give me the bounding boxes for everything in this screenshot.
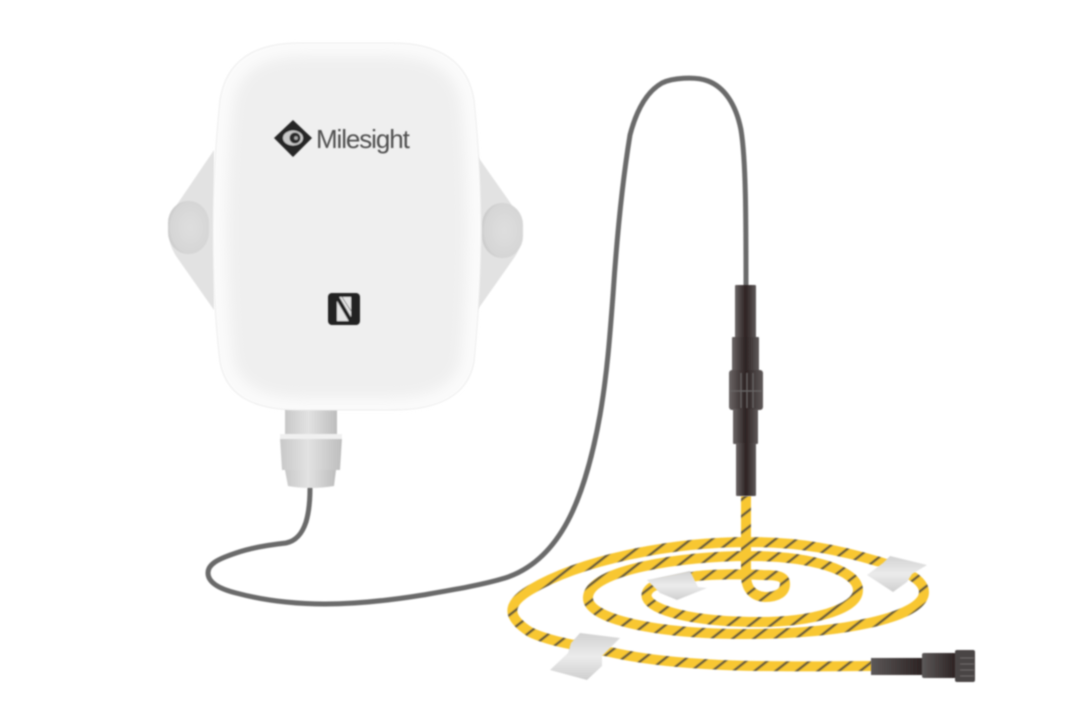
mounting ears bbox=[168, 150, 523, 312]
brand name: Milesight bbox=[316, 124, 411, 154]
rope end connector bbox=[871, 650, 975, 682]
logo mark bbox=[274, 120, 312, 157]
inline cable connector bbox=[729, 285, 763, 496]
gray sensor cable bbox=[208, 78, 746, 604]
device body bbox=[213, 43, 481, 410]
clip: lower left bbox=[550, 633, 620, 680]
cable gland bbox=[280, 409, 342, 488]
yellow sensing rope bbox=[512, 496, 924, 666]
clip: right bbox=[867, 556, 927, 592]
right screw cap bbox=[482, 203, 523, 258]
NFC icon bbox=[328, 293, 360, 325]
left screw cap bbox=[168, 201, 209, 254]
right mounting ear bbox=[476, 154, 522, 312]
left mounting ear bbox=[168, 150, 214, 310]
clip: inner bbox=[647, 571, 707, 600]
sensor rope clips bbox=[550, 556, 927, 680]
